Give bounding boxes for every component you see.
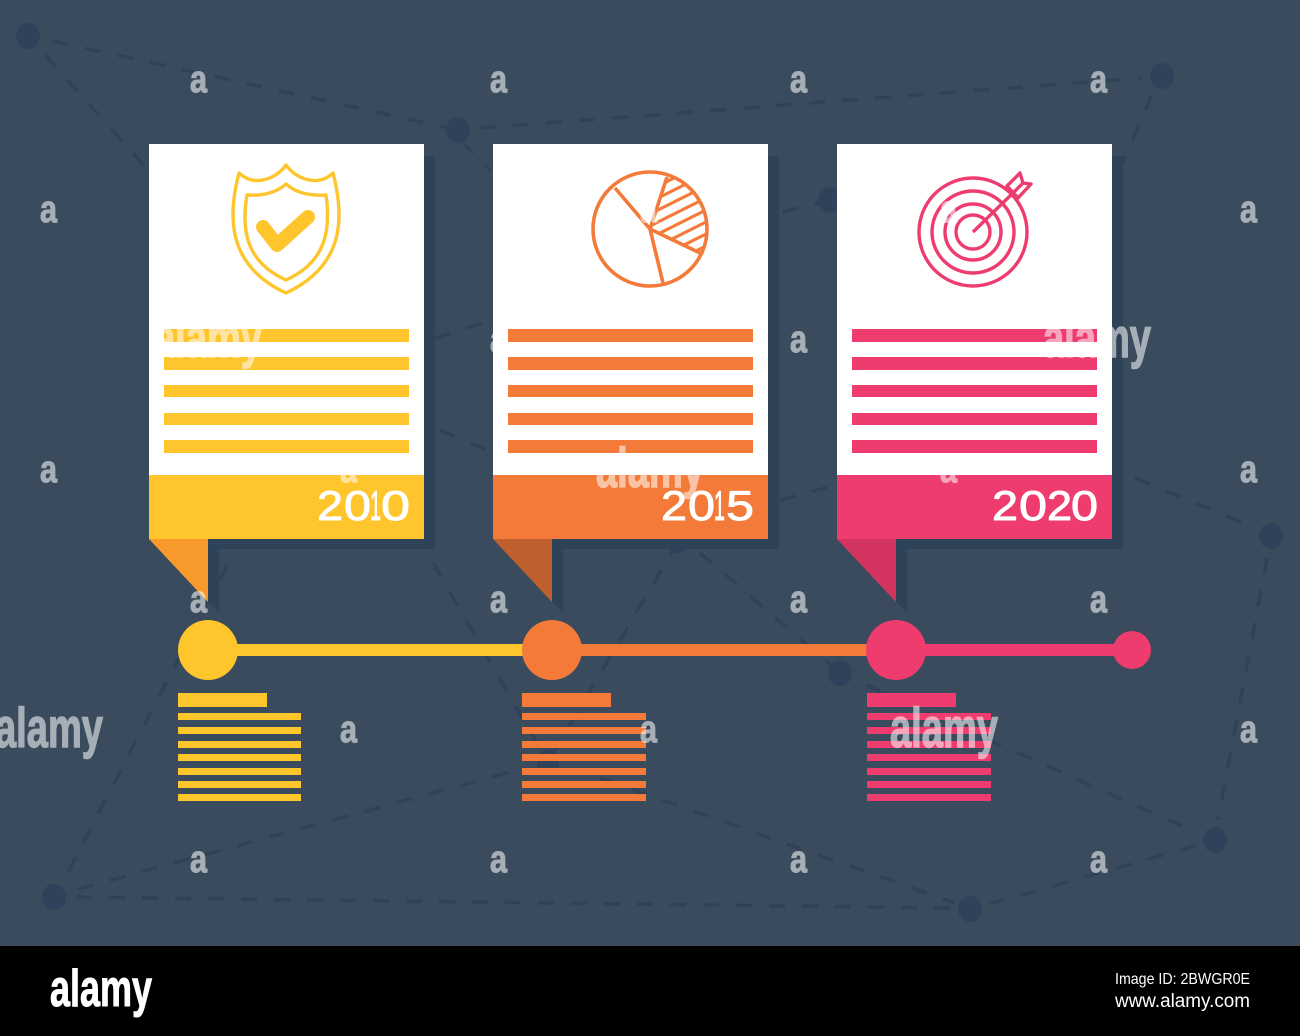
footer bar: Image ID: 2BWGR0E bbox=[1115, 971, 1250, 988]
watermarks: large: alamy bbox=[154, 306, 262, 369]
watermarks: large: alamy bbox=[1043, 306, 1151, 369]
watermarks: small: a bbox=[490, 839, 508, 881]
footer bar: www.alamy.com bbox=[1114, 991, 1250, 1012]
year 2015: 0 bbox=[688, 482, 715, 529]
watermarks: small: a bbox=[1090, 579, 1108, 621]
year 2015: 2 bbox=[661, 482, 687, 529]
year 2010: 2 bbox=[317, 482, 343, 529]
watermarks: small: a bbox=[940, 189, 958, 231]
watermarks: small: a bbox=[40, 449, 58, 491]
watermarks: small: a bbox=[790, 579, 808, 621]
panel: card 2010 bbox=[149, 144, 435, 612]
watermarks: small: a bbox=[1240, 449, 1258, 491]
year 2020: 2 bbox=[1047, 482, 1072, 529]
watermarks: small: a bbox=[190, 579, 208, 621]
watermarks: small: a bbox=[790, 839, 808, 881]
timeline bbox=[178, 620, 1151, 680]
panel: card 2015 bbox=[493, 144, 779, 612]
year 2015: 5 bbox=[726, 482, 754, 529]
watermarks: small: a bbox=[40, 189, 58, 231]
year 2020 bbox=[992, 482, 1098, 529]
year 2015: 1 bbox=[714, 482, 725, 529]
year 2020: 2 bbox=[992, 482, 1018, 529]
watermarks: small: a bbox=[1240, 189, 1258, 231]
watermarks: small: a bbox=[490, 59, 508, 101]
footer bar bbox=[0, 946, 1300, 1036]
year 2020: 0 bbox=[1071, 482, 1098, 529]
watermarks: large bbox=[0, 306, 1151, 759]
icon: shield with check bbox=[233, 165, 339, 293]
text placeholder 2020 bbox=[867, 693, 991, 801]
watermarks: large: alamy bbox=[596, 436, 704, 499]
watermarks: small: a bbox=[1090, 59, 1108, 101]
icon: pie chart bbox=[591, 170, 709, 288]
watermarks: small: a bbox=[490, 579, 508, 621]
watermarks: small: a bbox=[190, 59, 208, 101]
watermarks: small: a bbox=[1090, 839, 1108, 881]
footer bar: alamy bbox=[50, 960, 152, 1018]
watermarks: small: a bbox=[340, 709, 358, 751]
icon: target with arrow bbox=[919, 173, 1031, 286]
watermarks: small: a bbox=[340, 449, 358, 491]
text placeholder 2015 bbox=[522, 693, 646, 801]
watermarks: small bbox=[40, 59, 1258, 881]
watermarks: small: a bbox=[790, 319, 808, 361]
watermarks: large: alamy bbox=[890, 696, 998, 759]
text placeholder 2010 bbox=[178, 693, 301, 801]
year 2010 bbox=[317, 482, 410, 529]
year 2020: 0 bbox=[1019, 482, 1047, 529]
watermarks: small: a bbox=[790, 59, 808, 101]
watermarks: small: a bbox=[940, 449, 958, 491]
watermarks: small: a bbox=[1240, 709, 1258, 751]
watermarks: small: a bbox=[190, 839, 208, 881]
year 2010: 0 bbox=[381, 482, 410, 529]
year 2015 bbox=[661, 482, 754, 529]
year 2010: 1 bbox=[370, 482, 381, 529]
watermarks: small: a bbox=[640, 709, 658, 751]
panel: card 2020 bbox=[837, 144, 1123, 612]
watermarks: small: a bbox=[490, 319, 508, 361]
watermarks: small: a bbox=[640, 189, 658, 231]
year 2010: 0 bbox=[344, 482, 371, 529]
